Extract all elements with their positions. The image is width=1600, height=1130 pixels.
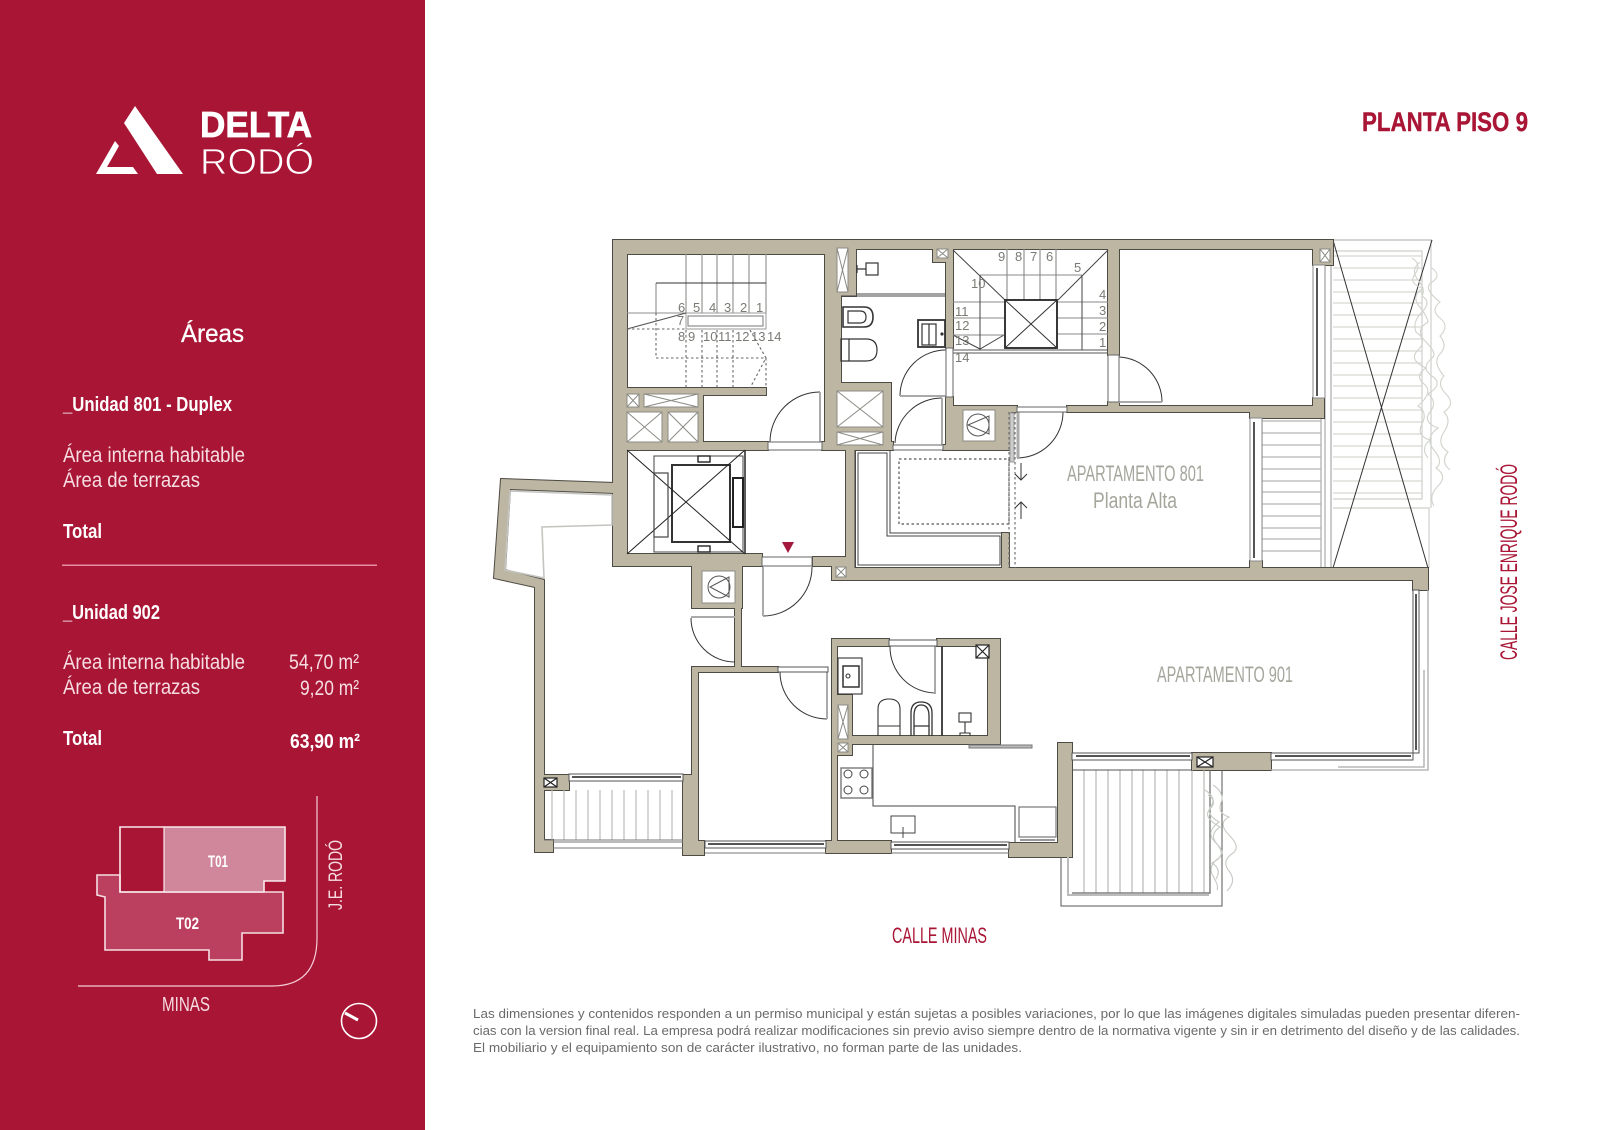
stair numbers: right: 11 (955, 304, 968, 319)
plants: south planter (1205, 785, 1236, 891)
text block: Unidad 902: Área de terrazas (63, 676, 200, 699)
label: Apartamento 901: APARTAMENTO 901 (1157, 662, 1293, 687)
terrace: southwest slats (505, 491, 683, 840)
shafts: core (627, 248, 1330, 752)
icon: triangle logo mark (96, 106, 183, 174)
text block: Unidad 902: Total (63, 728, 102, 750)
panel: red sidebar (0, 0, 425, 1130)
windows (553, 265, 1419, 853)
text block: Unidad 902: 54,70 m² (289, 651, 359, 674)
street label: Calle Jose Enrique Rodó: CALLE JOSE ENRIQUE RODÓ (1496, 464, 1523, 660)
walls (494, 240, 1428, 857)
stair numbers: right (955, 249, 1106, 365)
divider line (62, 564, 377, 566)
label: Planta Alta: Planta Alta (1093, 488, 1178, 513)
plants: northeast planter (1412, 258, 1451, 506)
doors (691, 348, 1162, 719)
logo wordmark: DELTA: DELTA (200, 104, 312, 145)
stair numbers: left: 8 (678, 329, 685, 344)
stair numbers: left: 14 (767, 329, 781, 344)
stair numbers: right: 1 (1099, 335, 1106, 350)
stair numbers: left: 3 (724, 300, 731, 315)
stair numbers: left: 2 (740, 300, 747, 315)
text block: Unidad 801: _Unidad 801 - Duplex (62, 394, 232, 416)
icon: compass (342, 1004, 376, 1038)
stair numbers: right: 13 (955, 333, 969, 348)
stair numbers: left: 5 (693, 300, 700, 315)
stair numbers: left: 9 (688, 329, 695, 344)
terrace: northeast slats (1321, 240, 1432, 568)
stair numbers: left: 11 (718, 329, 732, 344)
stair numbers: right: 9 (998, 249, 1005, 264)
tower T01 (164, 827, 285, 892)
key plan: building towers and streets (78, 796, 347, 1016)
stair numbers: left: 4 (709, 300, 716, 315)
stair numbers: right: 5 (1074, 260, 1081, 275)
bathroom fixtures: unit 801 (841, 263, 945, 361)
elevator (627, 450, 745, 554)
street label: Calle Minas: CALLE MINAS (892, 923, 987, 948)
stair numbers: left: 10 (703, 329, 717, 344)
stair numbers: left: 6 (678, 300, 685, 315)
stairs: left core (627, 254, 766, 388)
terrace: east slats (1262, 418, 1321, 568)
label T02: T02 (176, 914, 199, 933)
icon: entrance triangle (782, 542, 794, 553)
stair numbers: left (677, 300, 781, 344)
logo: Delta Rodó (96, 104, 314, 182)
shafts: dark markers (544, 645, 1213, 787)
disclaimer text: El mobiliario y el equipamiento son de carácter ilustrativo, no forman parte de las unidades. (473, 1041, 1022, 1055)
tower T02 (97, 875, 283, 960)
text block: Unidad 801: Total (63, 521, 102, 543)
floor plan (494, 240, 1451, 906)
text block: Unidad 902: Área interna habitable (63, 651, 245, 674)
east edge of apartment 901 (1271, 590, 1428, 770)
stair numbers: right: 3 (1099, 303, 1106, 318)
text block: Unidad 902: 9,20 m² (300, 677, 359, 700)
text block: Unidad 902 (62, 602, 360, 753)
tower divider (163, 827, 165, 892)
terrace: south slats (1061, 770, 1222, 906)
kitchen (841, 744, 1056, 842)
stairs: right core (953, 249, 1108, 353)
logo wordmark: RODÓ: RODÓ (200, 141, 314, 182)
room outlines: 801 lower void (855, 412, 1015, 568)
stair numbers: right: 6 (1046, 249, 1053, 264)
text block: Unidad 801: Área interna habitable (63, 444, 245, 467)
label: Apartamento 801: APARTAMENTO 801 (1067, 461, 1204, 486)
stair numbers: right: 2 (1099, 319, 1106, 334)
tower outline (120, 827, 285, 892)
stair numbers: right: 10 (971, 276, 985, 291)
partition: upper bathroom (841, 294, 946, 296)
heading: Áreas: Áreas (181, 319, 244, 348)
stair numbers: right: 8 (1015, 249, 1022, 264)
disclaimer text: Las dimensiones y contenidos responden a un permiso municipal y están sujetas a posibles variaciones, por lo que las imágenes digitales simuladas pueden presentar diferen- (473, 1007, 1520, 1021)
arrows: stair direction (1015, 463, 1027, 519)
stair numbers: left: 1 (756, 300, 763, 315)
disclaimer text (473, 1007, 1520, 1055)
disclaimer text: cias con la version final real. La empresa podrá realizar modificaciones sin previo aviso siempre dentro de la normativa vigente y sin ir en detrimento del diseño y de las calidades. (473, 1024, 1520, 1038)
text block: Unidad 801: Área de terrazas (63, 469, 200, 492)
stair numbers: left: 13 (751, 329, 765, 344)
stair numbers: right: 12 (955, 318, 969, 333)
text block: Unidad 801 (62, 394, 245, 543)
label T01: T01 (208, 852, 228, 871)
stair numbers: right: 14 (955, 350, 969, 365)
symbols: pressure shafts (708, 414, 989, 598)
street label MINAS: MINAS (162, 994, 210, 1016)
stair numbers: right: 7 (1030, 249, 1037, 264)
bathroom fixtures: unit 901 (838, 646, 971, 736)
stair numbers: left: 12 (735, 329, 749, 344)
stair numbers: right: 4 (1099, 287, 1106, 302)
text block: Unidad 902: 63,90 m² (290, 731, 360, 753)
stair numbers: left: 7 (677, 313, 684, 328)
street corner line (78, 796, 317, 986)
street label J.E. RODÓ: J.E. RODÓ (325, 840, 347, 910)
text block: Unidad 902: _Unidad 902 (62, 602, 160, 624)
title: Planta Piso 9: PLANTA PISO 9 (1362, 107, 1528, 137)
